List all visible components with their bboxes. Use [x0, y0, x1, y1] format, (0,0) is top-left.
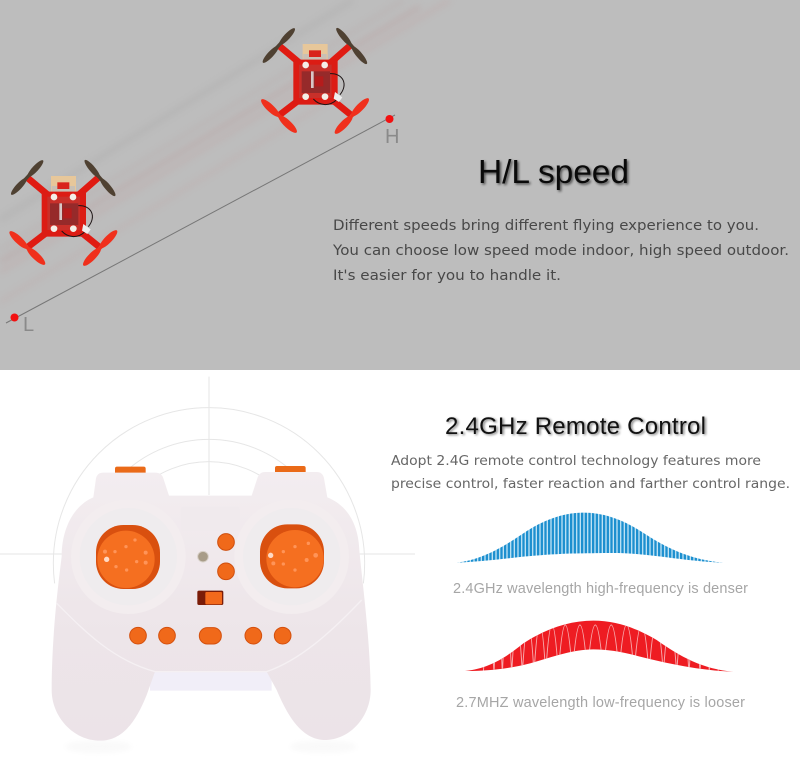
centre buttons	[218, 534, 234, 580]
heading: 2.4GHz Remote Control	[445, 413, 706, 440]
motion streaks	[0, 0, 450, 302]
controller illustration	[0, 377, 415, 753]
text block: Different speeds bring different flying experience to you.	[333, 218, 759, 234]
text block: You can choose low speed mode indoor, high speed outdoor.	[332, 243, 789, 259]
text block: Adopt 2.4G remote control technology features more	[391, 453, 761, 469]
trim buttons	[130, 627, 291, 644]
shoulder buttons	[115, 467, 146, 478]
text block	[391, 453, 790, 492]
caption: low frequency: 2.7MHZ wavelength low-frequency is looser	[456, 695, 745, 711]
power switch	[197, 591, 223, 605]
heading: 2.4GHz Remote Control	[446, 414, 708, 441]
point H	[385, 115, 399, 148]
heading: H/L speed	[478, 154, 629, 191]
drone low	[7, 158, 120, 268]
left stick	[96, 525, 160, 589]
signal rings	[0, 376, 415, 584]
heading: H/L speed	[480, 156, 630, 192]
panel: remote control	[0, 376, 789, 741]
indicator light	[198, 551, 208, 562]
chart: high frequency wave	[457, 513, 723, 563]
stick wells	[71, 499, 186, 614]
panel: H/L speed	[0, 0, 800, 370]
right stick	[260, 524, 324, 588]
controller body	[52, 472, 371, 741]
text block	[332, 218, 789, 284]
drone high	[259, 26, 371, 136]
slope line	[6, 115, 395, 323]
grip reflections	[65, 741, 132, 753]
battery cover	[181, 507, 240, 531]
text block: It's easier for you to handle it.	[333, 268, 561, 284]
text block: precise control, faster reaction and farther control range.	[391, 476, 790, 492]
point L	[10, 314, 34, 336]
caption: high frequency: 2.4GHz wavelength high-frequency is denser	[453, 581, 748, 597]
point H: H	[385, 126, 399, 148]
lower panel	[150, 667, 272, 691]
chart: low frequency wave	[465, 621, 733, 673]
point L: L	[23, 314, 34, 336]
